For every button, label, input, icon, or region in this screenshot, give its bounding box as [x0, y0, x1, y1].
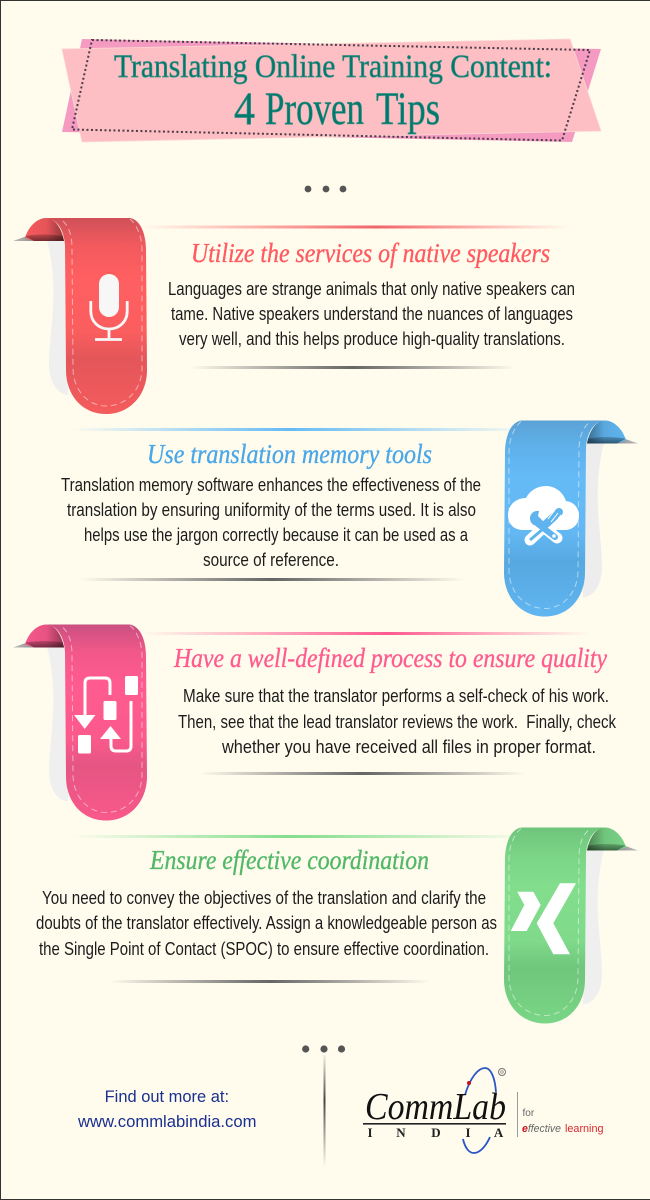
panel: defined process: [13, 624, 617, 820]
body text: helps use the jargon correctly because it can be used as a: [84, 524, 469, 545]
icon: microphone: [91, 274, 127, 340]
heading: Utilize the services of native speakers: [191, 238, 550, 268]
icon: X chevrons: [511, 883, 576, 954]
logo: CommLab India: N: [396, 1125, 406, 1140]
footer: find out more: www.commlabindia.com: [77, 1113, 256, 1131]
logo: CommLab India: I: [465, 1125, 471, 1140]
heading: Ensure effective coordination: [149, 845, 429, 875]
top dots: [305, 186, 346, 192]
logo: CommLab India: [363, 1068, 604, 1153]
logo: CommLab India: CommLab: [365, 1086, 506, 1128]
footer: find out more: [77, 1088, 256, 1131]
panel: effective coordination: [36, 828, 638, 1024]
title line 1: Translating Online Training Content:: [114, 49, 552, 85]
body text: [178, 685, 617, 757]
body text: Translation memory software enhances the effectiveness of the: [61, 474, 481, 495]
logo: CommLab India: learning: [565, 1123, 604, 1135]
body text: source of reference.: [203, 549, 339, 570]
icon: process flow: [74, 676, 138, 754]
logo: CommLab India: for: [522, 1108, 535, 1119]
heading: Use translation memory tools: [147, 439, 432, 469]
title banner: [62, 39, 601, 142]
title line 2: Proven: [265, 83, 364, 135]
body text: whether you have received all files in proper format.: [221, 736, 596, 757]
body text: [61, 474, 481, 570]
body text: very well, and this helps produce high-quality translations.: [179, 328, 565, 349]
logo: CommLab India: D: [431, 1125, 441, 1140]
logo: CommLab India: effective: [522, 1123, 561, 1135]
blue ribbon: [504, 420, 638, 616]
logo: CommLab India: I: [367, 1125, 373, 1140]
body text: translation by ensuring uniformity of the terms used. It is also: [67, 499, 476, 520]
panel: native speakers: [13, 218, 575, 414]
body text: the Single Point of Contact (SPOC) to ensure effective coordination.: [39, 938, 489, 959]
title line 2: 4: [234, 83, 255, 135]
footer: find out more: Find out more at:: [105, 1088, 229, 1106]
body text: You need to convey the objectives of the translation and clarify the: [42, 887, 486, 908]
panel: translation memory: [61, 420, 638, 616]
title line 2: Tips: [376, 83, 440, 135]
logo: CommLab India: A: [494, 1125, 504, 1140]
title line 2: [234, 83, 440, 135]
red ribbon: [13, 218, 147, 414]
icon: cloud with tools: [508, 486, 579, 540]
green ribbon: [504, 828, 638, 1024]
bottom dots: [302, 1045, 345, 1053]
body text: [36, 887, 497, 959]
body text: [168, 278, 575, 349]
body text: doubts of the translator effectively. Assign a knowledgeable person as: [36, 912, 497, 933]
pink ribbon: [13, 624, 147, 820]
